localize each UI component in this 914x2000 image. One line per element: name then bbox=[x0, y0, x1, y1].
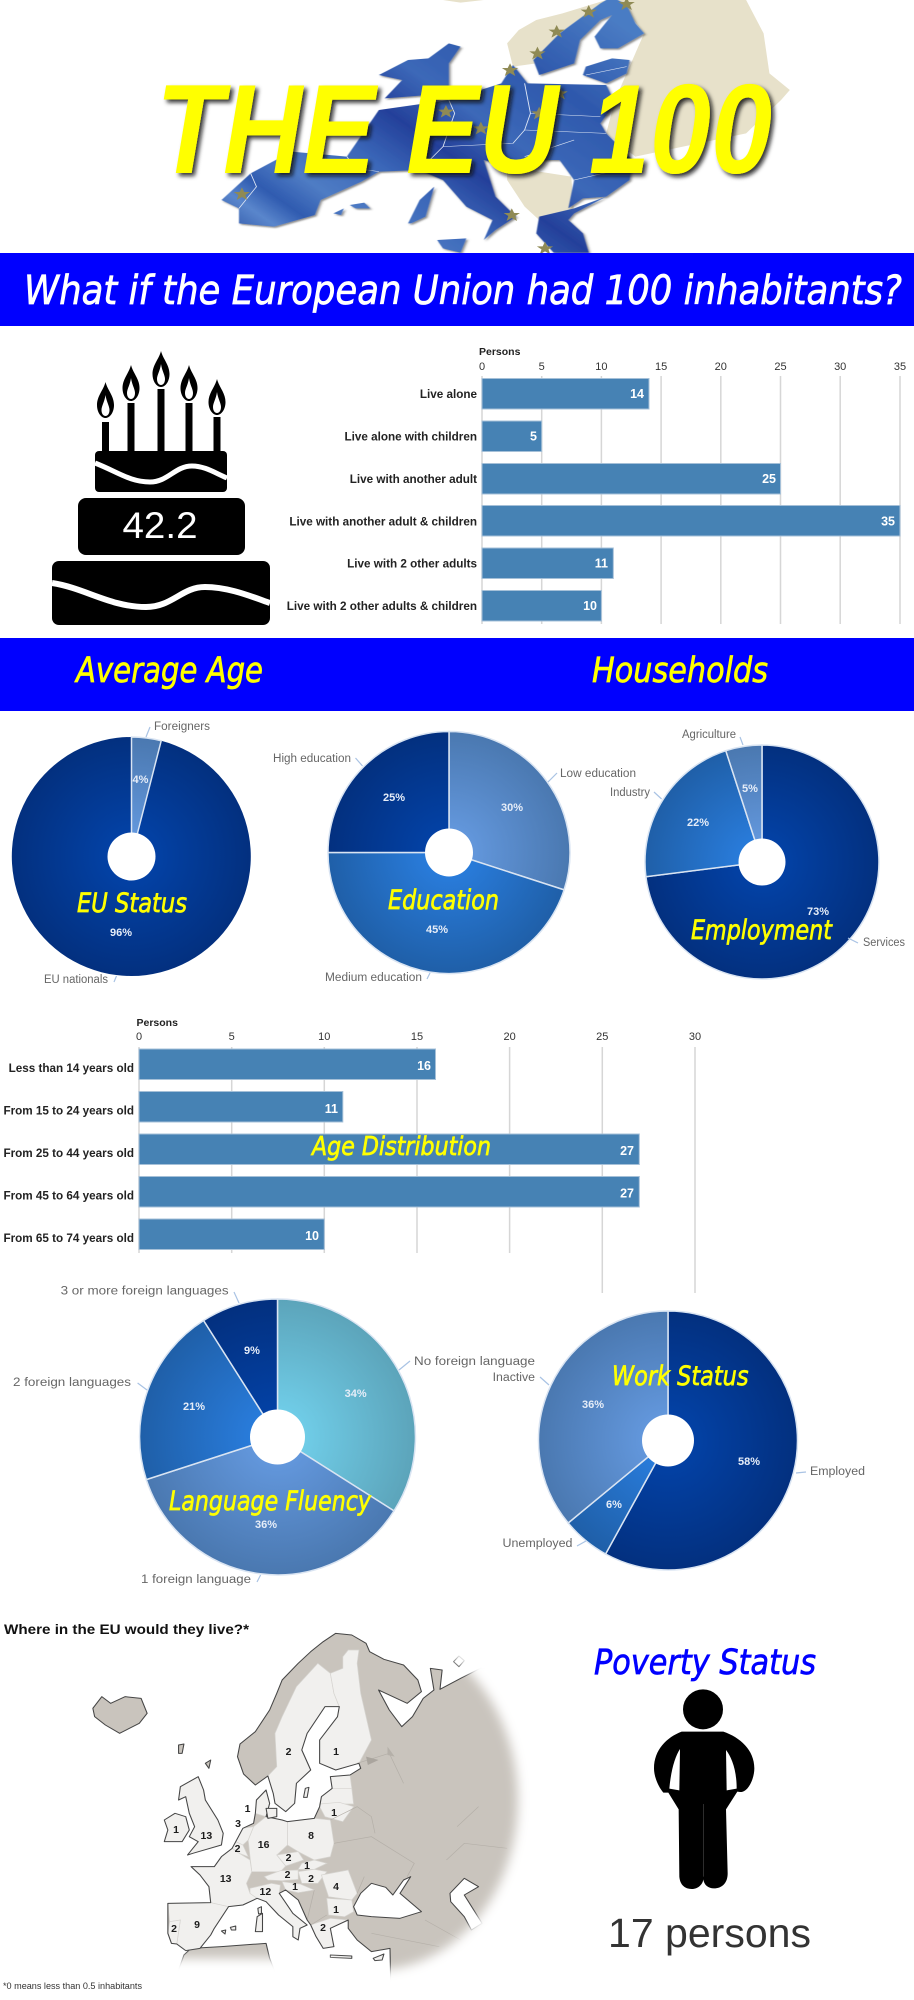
banner: subtitle bbox=[0, 253, 914, 326]
map numbers: 12 bbox=[260, 1886, 271, 1898]
bar chart: households: 10 bbox=[595, 361, 608, 373]
map numbers: 2 bbox=[286, 1746, 292, 1758]
pie chart: work status: Inactive bbox=[493, 1372, 535, 1384]
bar chart: households bbox=[287, 346, 906, 624]
bar chart: age distribution: 27 bbox=[620, 1186, 634, 1200]
bar chart: households: Persons bbox=[479, 346, 521, 358]
pie chart: EU status: EU Status bbox=[77, 888, 187, 919]
bar chart: households: 30 bbox=[834, 361, 846, 373]
pie chart: employment: 22% bbox=[687, 817, 709, 829]
bar chart: households: 11 bbox=[595, 556, 608, 570]
pie chart: language fluency: No foreign language bbox=[414, 1356, 535, 1368]
pie chart: employment: Employment bbox=[691, 915, 833, 946]
bar chart: households: 25 bbox=[762, 472, 776, 486]
pie chart: EU status: EU nationals bbox=[44, 974, 108, 986]
bar chart: age distribution: 27 bbox=[620, 1144, 634, 1158]
beige non-EU land bbox=[443, 0, 790, 220]
bar chart: age distribution: 30 bbox=[689, 1031, 701, 1043]
statistic: 17 persons: 17 persons bbox=[608, 1910, 811, 1956]
pie chart: language fluency: 36% bbox=[255, 1519, 277, 1531]
map numbers: 1 bbox=[304, 1860, 310, 1872]
bar chart: households: 25 bbox=[774, 361, 787, 373]
pie chart: language fluency: 3 or more foreign languages bbox=[61, 1286, 229, 1298]
bar chart: households: Live with another adult & children bbox=[289, 516, 477, 528]
pie chart: language fluency: 1 foreign language bbox=[141, 1574, 251, 1586]
pie chart: employment bbox=[610, 729, 905, 979]
pie chart: employment: 5% bbox=[742, 783, 758, 795]
map numbers: 2 bbox=[235, 1843, 241, 1855]
bar chart: households: 10 bbox=[583, 599, 597, 613]
map numbers: 1 bbox=[292, 1881, 298, 1893]
bar chart: households: Live alone with children bbox=[345, 430, 477, 444]
bar chart: age distribution: From 25 to 44 years old bbox=[3, 1147, 134, 1160]
blue EU landmass bbox=[222, 0, 644, 253]
map numbers: 16 bbox=[258, 1839, 270, 1851]
pie chart: language fluency: 2 foreign languages bbox=[13, 1377, 131, 1389]
bar chart: age distribution: From 45 to 64 years old bbox=[3, 1190, 134, 1202]
bar chart: households: 15 bbox=[655, 361, 667, 373]
title: THE EU 100 bbox=[156, 58, 772, 200]
heading: where in the EU: Where in the EU would they live?* bbox=[4, 1621, 250, 1637]
pie chart: work status: Unemployed bbox=[502, 1538, 572, 1550]
pie chart: language fluency: Language Fluency bbox=[169, 1486, 372, 1517]
map numbers: 3 bbox=[235, 1818, 241, 1830]
map: population by EU country bbox=[92, 1632, 524, 1978]
bar chart: households: 35 bbox=[881, 514, 895, 528]
bar chart: age distribution: Age Distribution bbox=[310, 1132, 491, 1162]
pie chart: education: Low education bbox=[560, 768, 636, 780]
map numbers: 1 bbox=[173, 1824, 179, 1836]
pie chart: education: Medium education bbox=[325, 972, 422, 984]
pie chart: education: Education bbox=[388, 885, 499, 916]
bar chart: households: 0 bbox=[479, 361, 485, 373]
map numbers: 2 bbox=[171, 1923, 177, 1935]
pie chart: work status: Employed bbox=[810, 1466, 865, 1478]
map numbers: 2 bbox=[286, 1852, 292, 1864]
bar chart: households: 5 bbox=[539, 361, 545, 373]
map numbers: 8 bbox=[308, 1830, 314, 1842]
footnote: *0 means less than 0.5 inhabitants bbox=[3, 1981, 142, 1991]
bar chart: age distribution: 0 bbox=[136, 1031, 142, 1043]
map numbers: 1 bbox=[333, 1904, 339, 1916]
header map of the EU bbox=[222, 0, 790, 254]
pie chart: education: High education bbox=[273, 753, 351, 765]
bar chart: age distribution: 10 bbox=[318, 1031, 330, 1043]
map numbers: 2 bbox=[308, 1873, 314, 1885]
banner: section headings: Average Age bbox=[74, 651, 263, 691]
bar chart: age distribution: 10 bbox=[305, 1229, 319, 1243]
bar chart: age distribution: 20 bbox=[503, 1031, 516, 1043]
bar chart: age distribution: From 65 to 74 years old bbox=[3, 1232, 134, 1245]
map numbers: 13 bbox=[220, 1873, 232, 1885]
bar chart: age distribution: From 15 to 24 years old bbox=[3, 1104, 134, 1118]
map numbers: 2 bbox=[285, 1869, 291, 1881]
map numbers: 1 bbox=[333, 1746, 339, 1758]
map numbers: 1 bbox=[331, 1807, 337, 1819]
pie chart: EU status: 96% bbox=[110, 927, 132, 939]
pie chart: education bbox=[273, 732, 636, 984]
pie chart: work status: 58% bbox=[738, 1456, 760, 1468]
pie chart: work status: 36% bbox=[582, 1399, 604, 1411]
map numbers bbox=[171, 1746, 339, 1935]
pie chart: education: 30% bbox=[501, 802, 523, 814]
bar chart: age distribution: Less than 14 years old bbox=[9, 1062, 134, 1075]
pie chart: EU status: 4% bbox=[133, 774, 149, 786]
icon: person with empty pockets bbox=[654, 1689, 754, 1889]
bar chart: age distribution: Persons bbox=[136, 1017, 178, 1029]
map stars bbox=[234, 0, 635, 254]
map numbers: 13 bbox=[201, 1830, 212, 1842]
bar chart: households: Live with 2 other adults bbox=[347, 558, 477, 570]
map numbers: 2 bbox=[320, 1922, 326, 1934]
bar chart: age distribution: 11 bbox=[325, 1102, 338, 1116]
pie chart: employment: Industry bbox=[610, 787, 650, 799]
pie chart: education: 45% bbox=[426, 924, 448, 936]
country borders bbox=[239, 67, 632, 208]
bar chart: households: 14 bbox=[630, 387, 644, 401]
banner: section headings: Households bbox=[592, 651, 768, 691]
pie chart: employment: 73% bbox=[807, 906, 829, 918]
pie chart: work status: 6% bbox=[606, 1499, 622, 1511]
pie chart: language fluency bbox=[13, 1286, 535, 1586]
pie chart: employment: Services bbox=[863, 937, 905, 949]
bar chart: age distribution: 15 bbox=[411, 1031, 423, 1043]
map numbers: 1 bbox=[245, 1803, 251, 1815]
bar chart: age distribution: 5 bbox=[229, 1031, 235, 1043]
pie chart: EU status: Foreigners bbox=[154, 721, 210, 733]
pie chart: employment: Agriculture bbox=[682, 729, 736, 741]
map numbers: 4 bbox=[333, 1881, 339, 1893]
pie chart: work status bbox=[493, 1311, 865, 1570]
banner: section headings bbox=[0, 638, 914, 711]
bar chart: age distribution: 16 bbox=[417, 1059, 431, 1073]
pie chart: language fluency: 34% bbox=[345, 1388, 367, 1400]
bar chart: households: Live with 2 other adults & children bbox=[287, 600, 477, 613]
pie chart: EU status bbox=[12, 721, 251, 986]
bar chart: households: 5 bbox=[530, 430, 537, 444]
map numbers: 9 bbox=[194, 1919, 200, 1931]
bar chart: households: Live with another adult bbox=[350, 473, 477, 486]
bar chart: households: 35 bbox=[894, 361, 906, 373]
heading: poverty status: Poverty Status bbox=[594, 1643, 816, 1683]
bar chart: households: Live alone bbox=[420, 388, 477, 401]
pie chart: language fluency: 9% bbox=[244, 1345, 260, 1357]
icon: birthday cake with average age: 42.2 bbox=[122, 505, 198, 546]
bar chart: age distribution: 25 bbox=[596, 1031, 608, 1043]
icon: birthday cake with average age bbox=[52, 351, 270, 625]
bar chart: households: 20 bbox=[715, 361, 727, 373]
pie chart: language fluency: 21% bbox=[183, 1401, 205, 1413]
pie chart: work status: Work Status bbox=[612, 1361, 748, 1392]
bar chart: age distribution bbox=[3, 1017, 701, 1293]
pie chart: education: 25% bbox=[383, 792, 405, 804]
